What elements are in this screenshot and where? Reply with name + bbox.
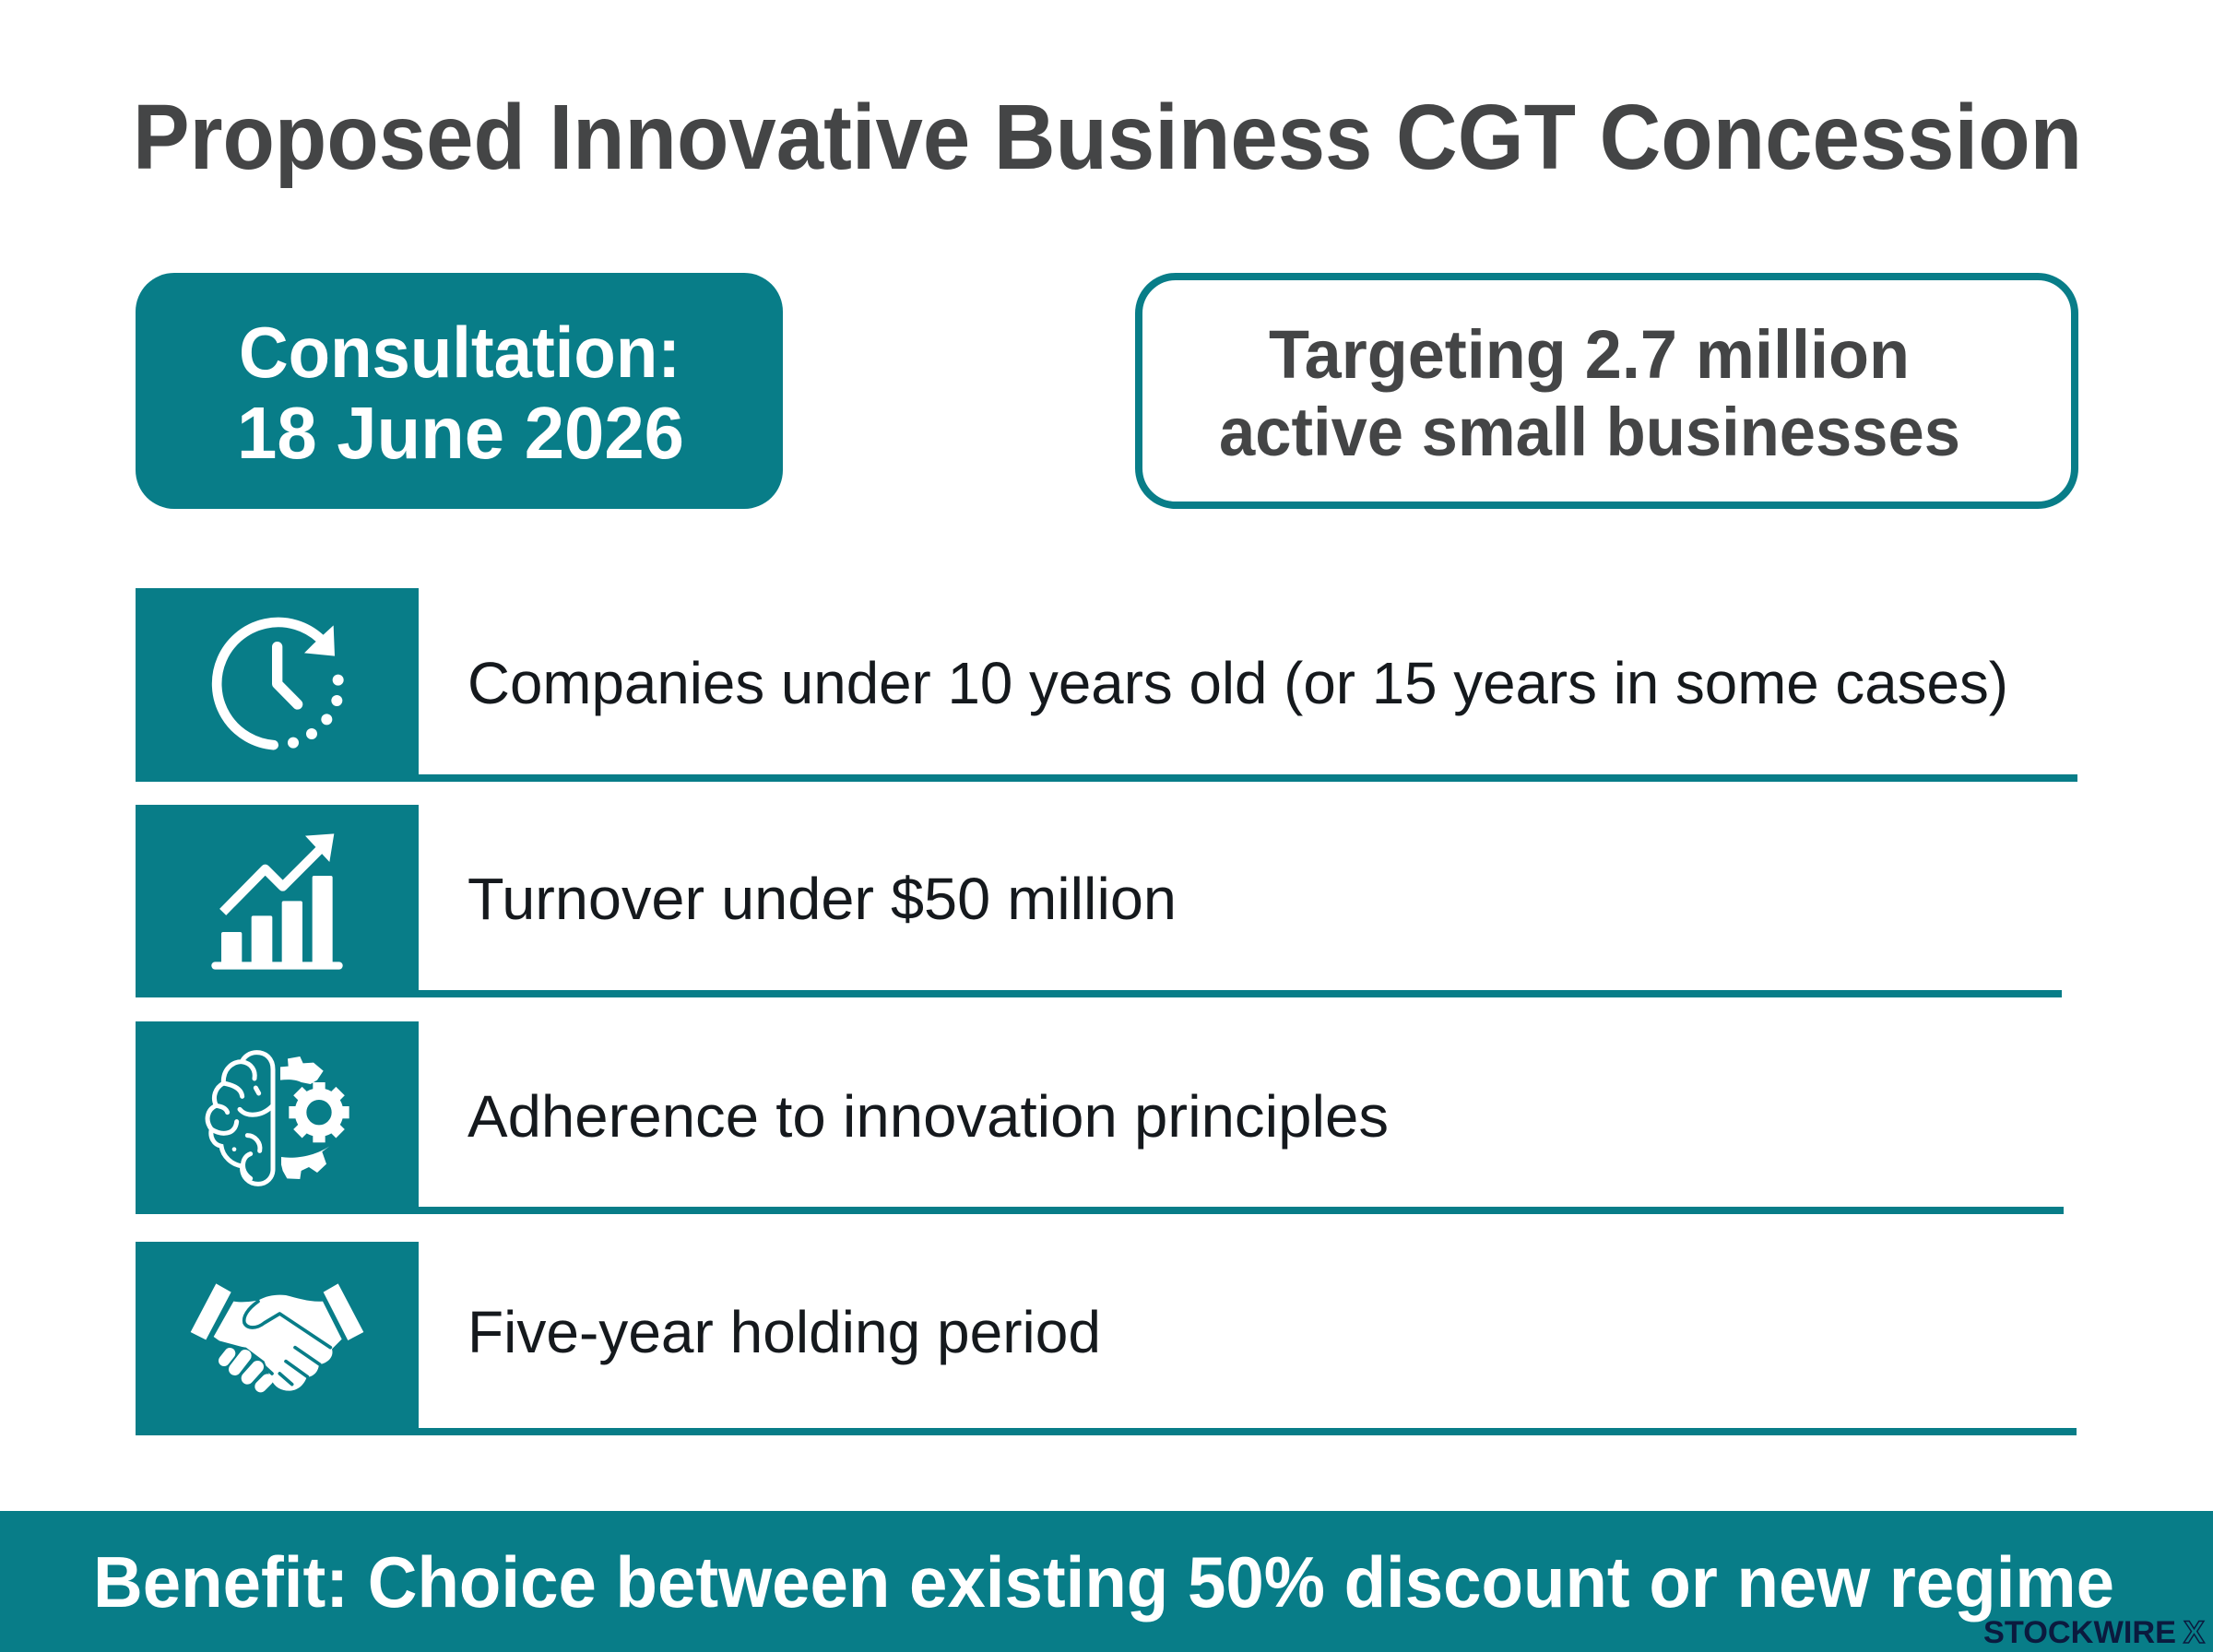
criterion text: innovation: Adherence to innovation principles xyxy=(467,1083,1389,1150)
icon: clock with arrow xyxy=(217,622,344,749)
panel: consultation date: 18 June 2026 xyxy=(237,392,684,474)
row: turnover xyxy=(136,805,2062,997)
panel: consultation date xyxy=(136,273,783,509)
icon: growth chart xyxy=(211,833,343,970)
row: innovation xyxy=(136,1021,2064,1214)
criterion text: age: Companies under 10 years old (or 15 years in some cases) xyxy=(467,650,2008,716)
watermark: StockwireX: STOCKWIRE xyxy=(1983,1615,2176,1650)
panel: target audience xyxy=(1139,277,2075,505)
panel: target audience: Targeting 2.7 million xyxy=(1269,316,1910,393)
panel: target audience: active small businesses xyxy=(1219,394,1960,470)
benefit banner xyxy=(0,1511,2213,1652)
watermark: StockwireX: X xyxy=(2183,1615,2205,1650)
title: Proposed Innovative Business CGT Concession xyxy=(133,86,2082,189)
panel: consultation date: Consultation: xyxy=(239,312,680,393)
row: holding period xyxy=(136,1242,2077,1435)
criterion text: turnover: Turnover under $50 million xyxy=(467,866,1177,932)
icon: handshake xyxy=(191,1283,363,1391)
criterion text: holding period: Five-year holding period xyxy=(467,1299,1101,1365)
row: company age xyxy=(136,588,2077,782)
benefit banner: Benefit: Choice between existing 50% discount or new regime xyxy=(93,1541,2114,1622)
icon: brain and gears xyxy=(207,1053,349,1184)
